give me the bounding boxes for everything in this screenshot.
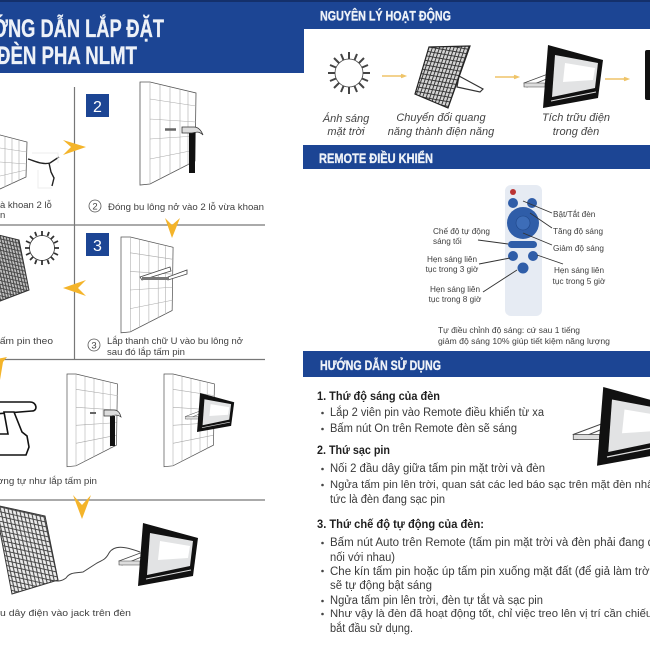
arrow: [495, 76, 518, 78]
heading: user guide: HƯỚNG DẪN SỬ DỤNG: [320, 356, 441, 373]
leader lines: [478, 201, 563, 292]
icon: wall with bracket: [121, 237, 187, 333]
label: conversion: [388, 112, 495, 138]
heading: remote: REMOTE ĐIỀU KHIỂN: [319, 149, 433, 166]
arrow: [605, 78, 628, 80]
label: on off: Bật/Tắt đèn: [553, 209, 596, 219]
section 1: Bấm nút On trên Remote đèn sẽ sáng: [330, 423, 517, 435]
label: dimmer: Giảm độ sáng: [553, 244, 604, 253]
label: 5 hours: [553, 266, 606, 286]
label: brighter: Tăng độ sáng: [553, 227, 604, 236]
label: auto mode: sáng tối: [433, 237, 462, 246]
panel: remote control: [303, 145, 650, 346]
step 1 caption: à khoan 2 lỗ: [0, 200, 52, 211]
arrow: [382, 74, 405, 78]
arrow: step 3 to 4 left: [0, 357, 7, 380]
arrow: step 2 to 3: [165, 218, 180, 238]
section 3: Ngửa tấm pin lên trời, đèn tự tắt và sạc pin: [330, 594, 543, 607]
title line 2: ĐÈN PHA NLMT: [0, 41, 137, 70]
icon: floodlight: [524, 45, 603, 108]
heading: how it works: [304, 2, 650, 29]
panel: step dividers: [0, 87, 265, 500]
section 1: [317, 391, 545, 435]
panel: step 1: [0, 135, 59, 221]
panel: step 4: [0, 374, 234, 487]
icon: solar panel: [415, 46, 483, 108]
icon: remote: [505, 185, 542, 316]
label: storage: trong đèn: [553, 126, 599, 138]
icon: sun: [25, 231, 59, 265]
panel: step 3: [86, 233, 243, 358]
step 1 caption: [0, 200, 52, 221]
panel: solar panel and sun, step 3 result: [0, 231, 59, 303]
icon: sun: [328, 52, 370, 94]
section 1: Lắp 2 viên pin vào Remote điều khiển từ xa: [330, 406, 545, 419]
icon: wall and hammer: [140, 82, 203, 185]
label: 5 hours: tục trong 5 giờ: [553, 277, 606, 286]
label: auto mode: [433, 227, 490, 246]
section 3: sẽ tự động bật sáng: [330, 580, 432, 592]
icon: drill: [0, 402, 36, 455]
step 2 caption: Đóng bu lông nở vào 2 lỗ vừa khoan: [108, 202, 264, 213]
step 5 caption: u dây điện vào jack trên đèn: [0, 608, 131, 619]
icon: wall with lamp: [164, 374, 234, 467]
step 3 caption: Lắp thanh chữ U vào bu lông nở: [107, 336, 243, 347]
icon: wall with hammer: [67, 374, 121, 467]
step 3 caption: sau đó lắp tấm pin: [107, 347, 185, 358]
panel: step 5: [0, 505, 198, 619]
arrow: step 4 to 5: [73, 495, 91, 519]
label: 8 hours: tục trong 8 giờ: [429, 295, 482, 304]
label: storage: Tích trữu điện: [542, 112, 610, 124]
heading: user guide: [303, 351, 650, 377]
section 1: 1. Thứ độ sáng của đèn: [317, 391, 440, 403]
label: 3 hours: tục trong 3 giờ: [426, 265, 479, 274]
arrow: step 3 to 4: [63, 280, 86, 296]
badge 2: 2: [93, 99, 102, 116]
icon: tilted solar panel: [0, 233, 29, 303]
badge 2: [86, 94, 109, 117]
step 1 caption: n: [0, 210, 5, 221]
step 2 caption: 2: [92, 202, 98, 212]
title banner: [0, 0, 650, 73]
section 3: bắt đầu sử dụng.: [330, 622, 413, 635]
label: conversion: Chuyển đổi quang: [396, 112, 487, 124]
section 3: 3. Thứ chế độ tự động của đèn:: [317, 519, 484, 531]
label: 5 hours: Hẹn sáng liên: [554, 266, 604, 275]
label: 8 hours: Hẹn sáng liên: [430, 285, 480, 294]
icon: solar panel: [0, 505, 58, 594]
step 3 caption: 3: [91, 340, 97, 352]
label: 3 hours: Hẹn sáng liên: [427, 255, 477, 264]
section 3: [317, 519, 650, 635]
icon: wall with drill: [0, 135, 59, 192]
label: 3 hours: [426, 255, 479, 274]
label: conversion: năng thành điện năng: [388, 126, 495, 138]
heading: how it works: NGUYÊN LÝ HOẠT ĐỘNG: [320, 6, 451, 24]
icon: floodlight: [573, 387, 650, 466]
section 2: tức là đèn đang sạc pin: [330, 494, 445, 506]
label: sunlight: [322, 112, 370, 138]
heading: remote: [303, 145, 650, 169]
section 2: Nối 2 đầu dây giữa tấm pin mặt trời và đèn: [330, 463, 545, 475]
note: auto dimming: giảm độ sáng 10% giúp tiết kiệm năng lượng: [438, 337, 610, 346]
label: 8 hours: [429, 285, 482, 304]
panel: user guide: [303, 351, 650, 635]
label: sunlight: Ánh sáng: [322, 112, 370, 125]
section 2: [317, 445, 650, 506]
note: auto dimming: [438, 326, 610, 346]
step 3 caption: [88, 336, 243, 358]
panel: step 2: [86, 82, 264, 213]
icon: floodlight: [119, 523, 198, 586]
label: sunlight: mặt trời: [327, 126, 365, 138]
icon: lit lamp cropped: [645, 50, 650, 100]
section 3: nối với nhau): [330, 552, 395, 564]
label: storage: [542, 112, 610, 138]
section 2: 2. Thứ sạc pin: [317, 445, 390, 457]
badge 3: [86, 233, 109, 256]
arrow: step 1 to 2: [63, 140, 86, 155]
label: auto mode: Chế độ tự động: [433, 227, 490, 236]
panel: how it works: [304, 2, 650, 138]
badge 3: 3: [93, 238, 102, 255]
icon: cable: [50, 547, 140, 581]
note: auto dimming: Tự điều chỉnh độ sáng: cứ sau 1 tiếng: [438, 326, 580, 335]
